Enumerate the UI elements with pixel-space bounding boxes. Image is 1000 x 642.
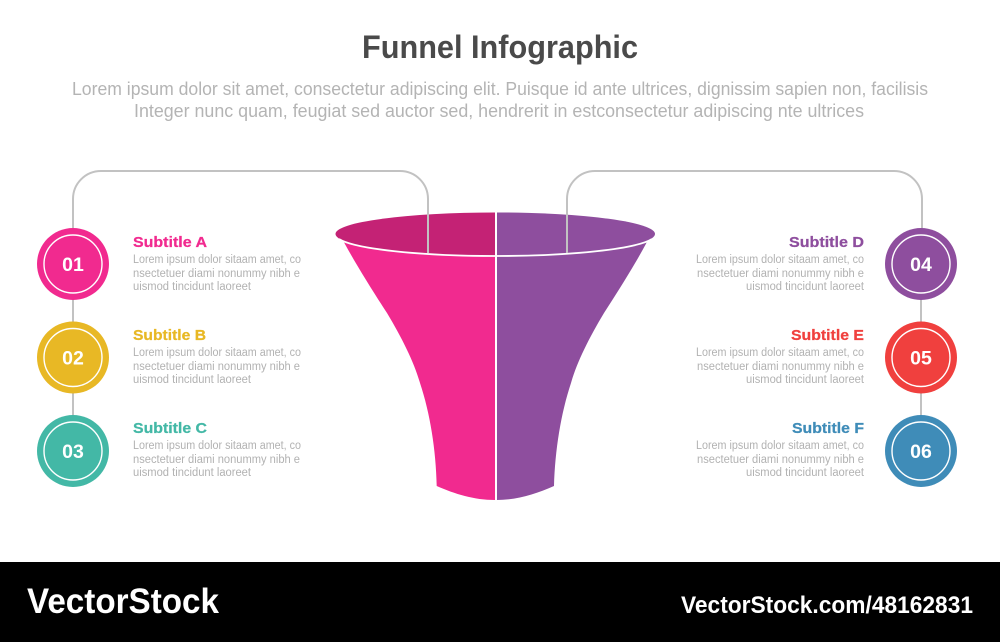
- item 06: Lorem ipsum dolor sitaam amet, co: [696, 440, 864, 452]
- funnel body left: [341, 236, 495, 500]
- funnel rim right: [497, 212, 655, 256]
- item 06: Subtitle F: [792, 421, 864, 437]
- item 03: uismod tincidunt laoreet: [133, 467, 252, 479]
- item 03: [37, 415, 301, 487]
- item 03: 03: [62, 441, 84, 463]
- item 06: [696, 415, 957, 487]
- item 01: uismod tincidunt laoreet: [133, 281, 252, 293]
- intro text: Lorem ipsum dolor sit amet, consectetur adipiscing elit. Puisque id ante ultrices, dignissim sapien non, facilisis: [72, 79, 928, 99]
- item 03: Subtitle C: [133, 421, 208, 437]
- funnel body right: [497, 236, 650, 500]
- item 05: uismod tincidunt laoreet: [746, 374, 865, 386]
- item 06: 06: [910, 441, 932, 463]
- item 04: Lorem ipsum dolor sitaam amet, co: [696, 254, 864, 266]
- item 02: Lorem ipsum dolor sitaam amet, co: [133, 347, 301, 359]
- item 01: [37, 228, 301, 300]
- item 04: Subtitle D: [789, 235, 864, 251]
- item 02: Subtitle B: [133, 328, 206, 344]
- item 05: Lorem ipsum dolor sitaam amet, co: [696, 347, 864, 359]
- item 03: nsectetuer diami nonummy nibh e: [133, 454, 300, 466]
- intro text: [72, 79, 928, 121]
- item 04: 04: [910, 254, 932, 276]
- funnel: [335, 212, 655, 500]
- rim highlight: [339, 239, 652, 256]
- item 02: uismod tincidunt laoreet: [133, 374, 252, 386]
- item 04: nsectetuer diami nonummy nibh e: [697, 268, 864, 280]
- intro text: Integer nunc quam, feugiat sed auctor sed, hendrerit in estconsectetur adipiscing nte ultrices: [134, 101, 864, 121]
- item 04: [696, 228, 957, 300]
- item 05: nsectetuer diami nonummy nibh e: [697, 361, 864, 373]
- item 01: Subtitle A: [133, 235, 208, 251]
- footer bar: VectorStock: [27, 582, 220, 621]
- item 02: nsectetuer diami nonummy nibh e: [133, 361, 300, 373]
- funnel rim left: [335, 212, 495, 256]
- item 05: Subtitle E: [791, 328, 864, 344]
- left vertical connector: [72, 298, 74, 420]
- connector right: [567, 171, 922, 253]
- item 02: 02: [62, 348, 84, 370]
- item 01: nsectetuer diami nonummy nibh e: [133, 268, 300, 280]
- right vertical connector: [920, 298, 922, 420]
- title: Funnel Infographic: [362, 29, 638, 65]
- footer bar: [0, 562, 1000, 642]
- item 05: 05: [910, 348, 932, 370]
- item 02: [37, 322, 301, 394]
- footer bar: VectorStock.com/48162831: [681, 592, 973, 619]
- item 03: Lorem ipsum dolor sitaam amet, co: [133, 440, 301, 452]
- item 05: [696, 322, 957, 394]
- item 06: nsectetuer diami nonummy nibh e: [697, 454, 864, 466]
- item 04: uismod tincidunt laoreet: [746, 281, 865, 293]
- item 06: uismod tincidunt laoreet: [746, 467, 865, 479]
- item 01: Lorem ipsum dolor sitaam amet, co: [133, 254, 301, 266]
- item 01: 01: [62, 254, 84, 276]
- connector left: [73, 171, 428, 253]
